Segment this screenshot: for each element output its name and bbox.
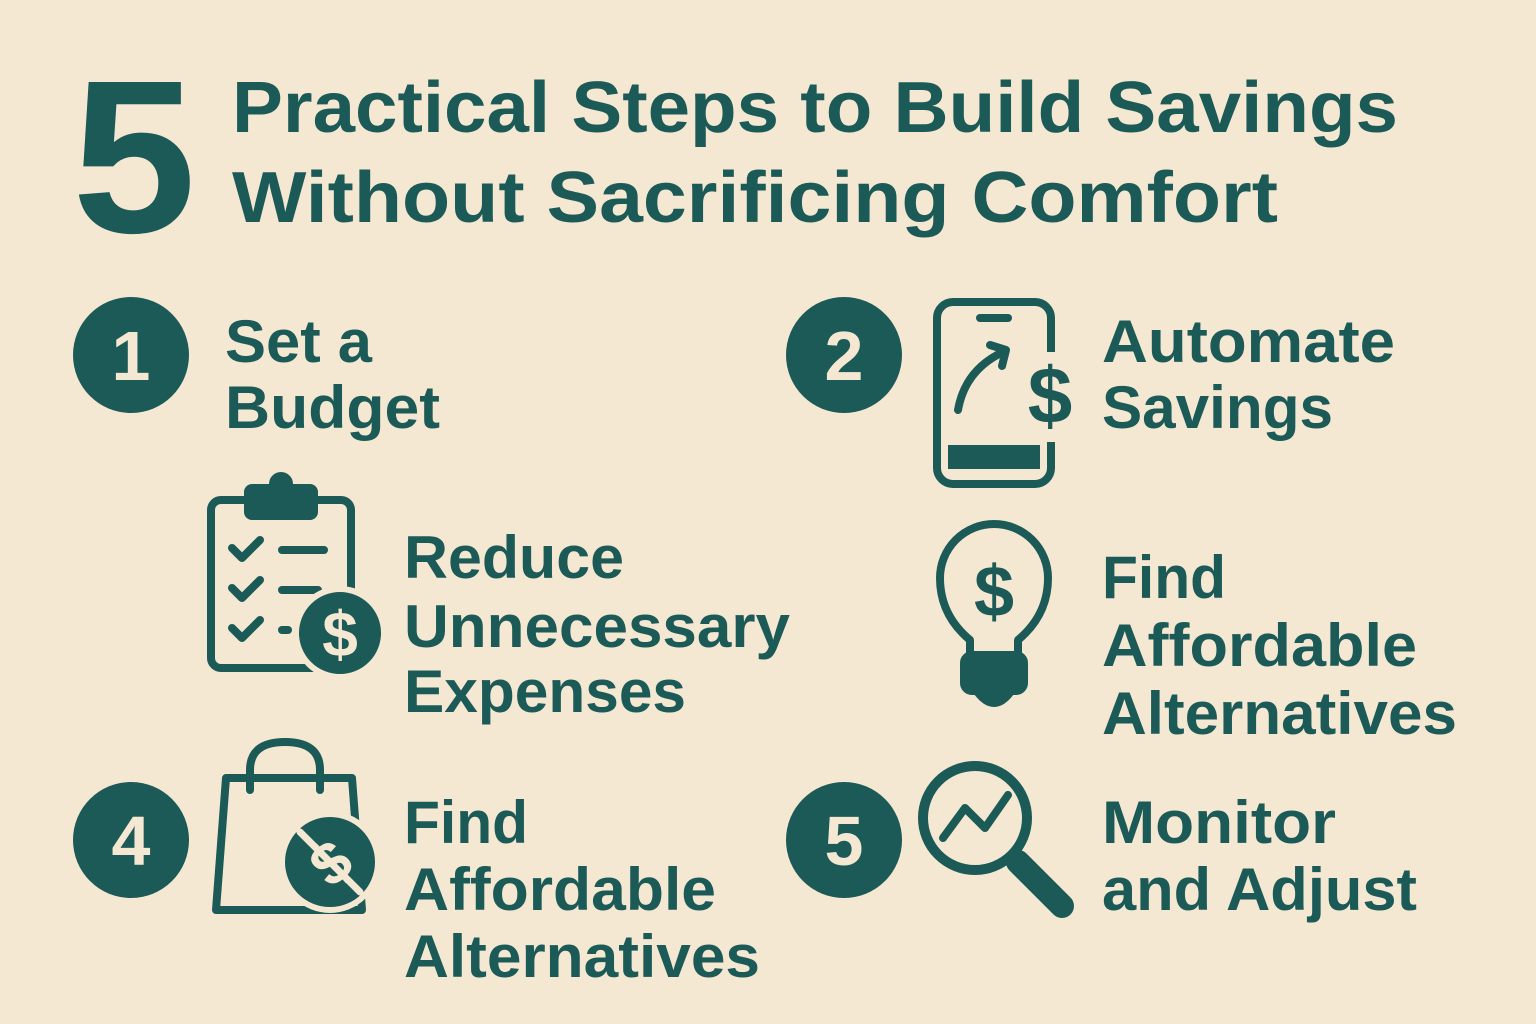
label: set a budget: Budget: [225, 374, 440, 441]
label: find affordable alternatives: Alternatives: [404, 923, 760, 990]
label: find affordable alternatives: Alternatives: [1102, 680, 1457, 747]
title text: Without Sacrificing Comfort: [232, 158, 1278, 238]
label: monitor and adjust: Monitor: [1102, 789, 1336, 856]
icon: magnifier with chart: [923, 766, 1062, 906]
label: automate savings: [1102, 308, 1395, 441]
icon: phone with dollar: [937, 302, 1077, 484]
label: reduce unnecessary expenses: Reduce: [404, 524, 624, 591]
label: find affordable alternatives: Find: [404, 789, 528, 856]
number badge 1: 1: [112, 317, 150, 395]
label: set a budget: [225, 308, 440, 441]
icon: shopping bag with discount: $: [297, 827, 365, 900]
number badge 5: 5: [825, 802, 863, 880]
label: reduce unnecessary expenses: [404, 524, 791, 725]
label: automate savings: Automate: [1102, 308, 1395, 375]
icon: shopping bag with discount: [216, 742, 378, 910]
number badge 1: [73, 297, 189, 413]
step 1: set a budget: [73, 297, 440, 441]
icon: clipboard with dollar: $: [322, 598, 358, 670]
icon: lightbulb with dollar: [940, 524, 1048, 703]
label: monitor and adjust: and Adjust: [1102, 856, 1417, 923]
label: find affordable alternatives: [404, 789, 760, 990]
number badge 5: [786, 782, 902, 898]
step 2: automate savings: [786, 297, 1395, 484]
label: monitor and adjust: [1102, 789, 1417, 923]
number badge 2: [786, 297, 902, 413]
step 5: monitor and adjust: [786, 766, 1417, 923]
label: automate savings: Savings: [1102, 374, 1333, 441]
label: find affordable alternatives: Find: [1102, 544, 1226, 611]
number badge 4: [73, 782, 189, 898]
label: set a budget: Set a: [225, 308, 373, 375]
label: reduce unnecessary expenses: Unnecessary: [404, 593, 791, 660]
title: [72, 36, 1398, 279]
step 3: reduce unnecessary expenses: [211, 476, 791, 725]
label: reduce unnecessary expenses: Expenses: [404, 658, 686, 725]
label: find affordable alternatives: [1102, 544, 1457, 747]
label: find affordable alternatives: Affordable: [1102, 612, 1417, 679]
title text: [232, 68, 1398, 238]
icon: clipboard with dollar: [211, 476, 384, 677]
label: find affordable alternatives: Affordable: [404, 856, 716, 923]
step: find affordable alternatives (right): [940, 524, 1457, 747]
icon: lightbulb with dollar: $: [974, 552, 1014, 632]
number badge 4: 4: [112, 802, 151, 880]
number badge 2: 2: [825, 317, 863, 395]
title text: Practical Steps to Build Savings: [232, 68, 1398, 148]
big number 5: 5: [72, 36, 196, 279]
icon: phone with dollar: $: [1028, 351, 1072, 440]
step 4: find affordable alternatives: [73, 742, 760, 990]
